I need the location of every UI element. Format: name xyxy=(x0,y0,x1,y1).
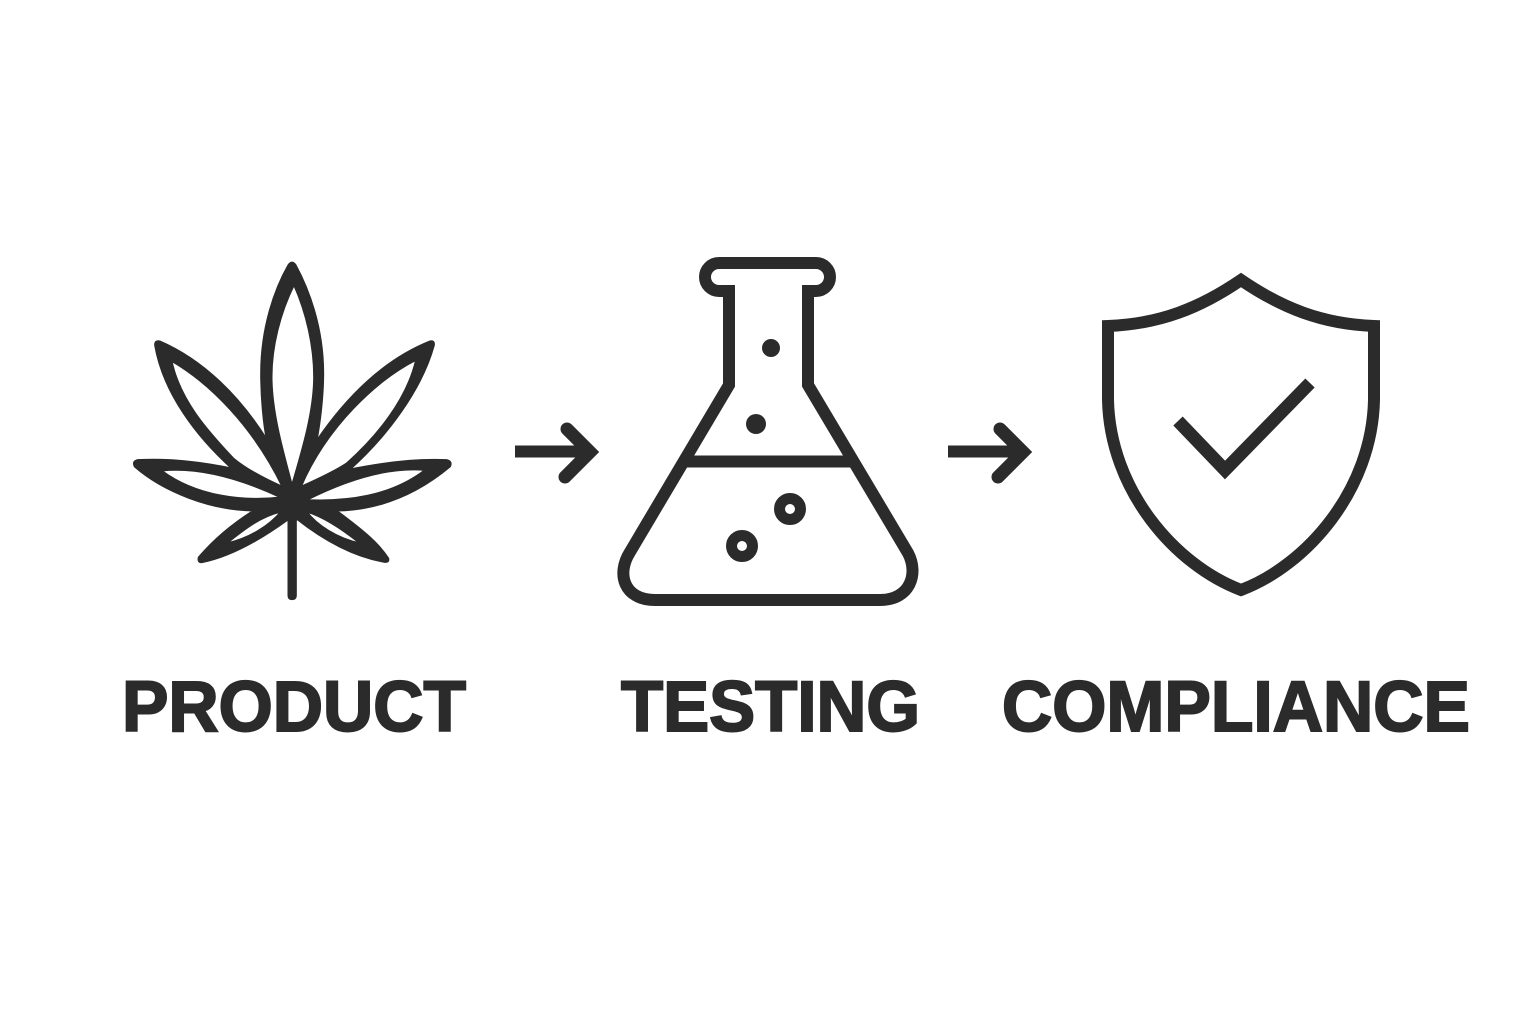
icon: shield with check mark xyxy=(1108,280,1374,590)
label: testing: TESTING xyxy=(621,668,920,747)
icon: laboratory flask xyxy=(623,263,913,600)
arrow: product to testing xyxy=(515,429,590,477)
label: compliance: COMPLIANCE xyxy=(1002,668,1470,747)
icon: cannabis leaf xyxy=(134,262,451,599)
label: product: PRODUCT xyxy=(122,668,466,747)
arrow: testing to compliance xyxy=(948,429,1023,477)
